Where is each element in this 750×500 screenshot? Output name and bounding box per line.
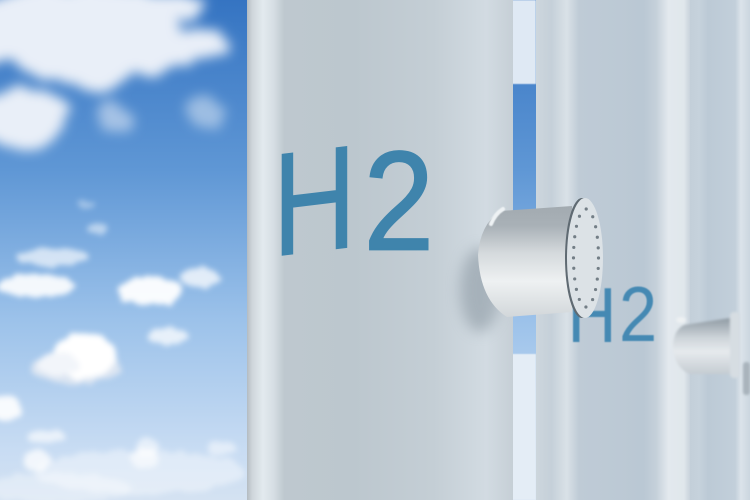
- label: small H2: 2: [619, 270, 657, 358]
- nozzle: rear: [673, 312, 750, 395]
- clouds: gap between columns: [512, 0, 536, 500]
- nozzle: main: [460, 198, 603, 332]
- clouds: lower left: [0, 333, 245, 500]
- label: large H2: H: [272, 115, 356, 289]
- clouds: top left: [0, 0, 230, 148]
- column: main: [247, 0, 513, 500]
- column: middle: [536, 0, 690, 500]
- label: small H2: H: [568, 273, 617, 359]
- nozzle flange: [565, 198, 599, 318]
- flange bolts: [574, 209, 598, 307]
- label: small H2: [568, 270, 657, 359]
- nozzle body: [478, 206, 572, 317]
- clouds: middle left: [0, 201, 222, 345]
- label: large H2: [272, 115, 434, 289]
- label: large H2: 2: [364, 123, 434, 280]
- nozzle shadow: [460, 248, 500, 332]
- column: far right: [690, 0, 750, 500]
